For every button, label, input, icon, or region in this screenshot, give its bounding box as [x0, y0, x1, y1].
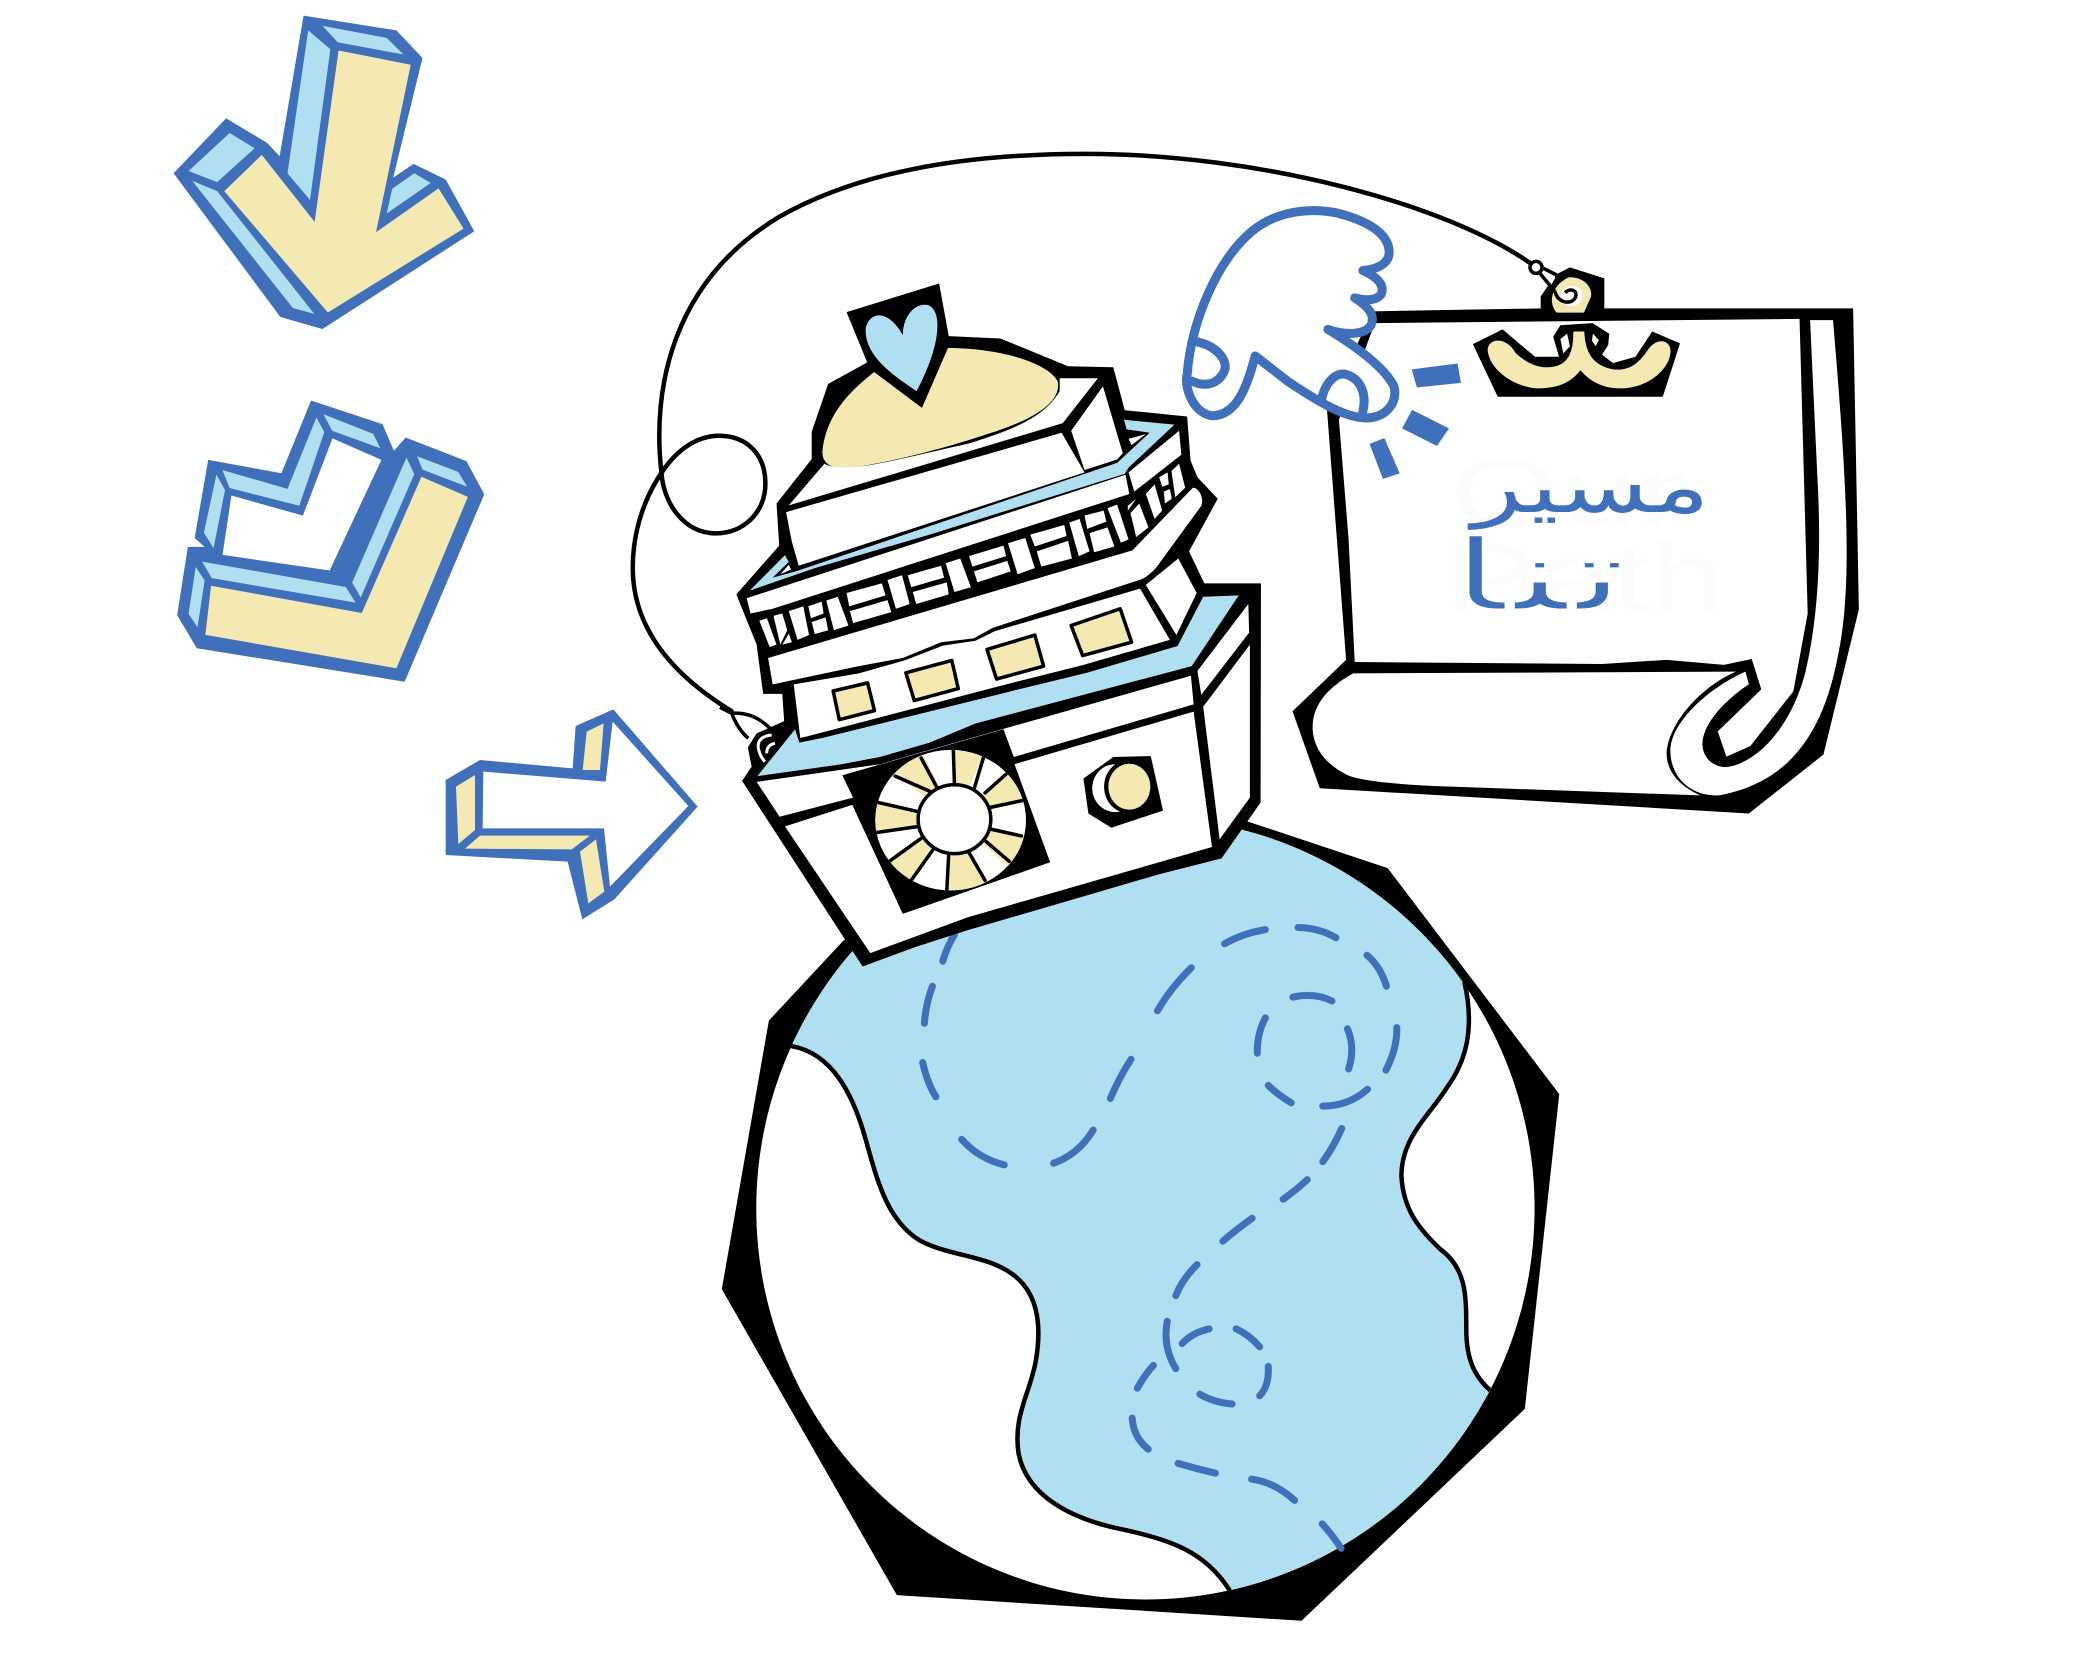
- globe: [700, 800, 1561, 1650]
- Arabic title on scroll: مسير: [1466, 445, 1710, 530]
- hand thumb and nail lines: [1192, 342, 1364, 412]
- ship black silhouette: [736, 283, 1261, 967]
- upper deck band: [747, 431, 1181, 614]
- Arabic title on scroll: تنا: [1447, 520, 1629, 631]
- curved rope linking ship and scroll: [633, 154, 1535, 711]
- porthole: [1083, 756, 1163, 828]
- hand pointing at the scroll: [1186, 211, 1395, 418]
- lower blue deck: [757, 595, 1239, 776]
- scroll bottom roll: [1313, 672, 1736, 795]
- faint background words on scroll: Our: [1450, 440, 1685, 546]
- faint background words on scroll: Path: [1445, 525, 1725, 631]
- arrow: pointing right toward the ship: [446, 709, 698, 919]
- arrow: large arrow pointing down: [174, 16, 474, 329]
- round vent window: [875, 750, 1026, 890]
- faint background words on scroll: [1445, 440, 1725, 631]
- scroll black silhouette: [1293, 308, 1859, 813]
- arrow: double chevron pointing down: [177, 400, 484, 682]
- blue rays: [1370, 364, 1461, 479]
- funnel dome: [822, 348, 1058, 468]
- scroll banner: [1293, 308, 1859, 813]
- coastlines: [792, 982, 1491, 1590]
- upper blue deck: [750, 420, 1174, 591]
- lower deck band: [768, 488, 1202, 684]
- cream windows: [833, 609, 1132, 720]
- scroll page: [1339, 319, 1808, 757]
- hull: [757, 604, 1250, 953]
- scroll hook: [1530, 261, 1604, 313]
- top cabin: [786, 378, 1123, 566]
- icon: heart: [866, 305, 937, 391]
- middle wall: [794, 559, 1197, 738]
- upper window row: [759, 464, 1185, 647]
- Arabic title on scroll: [1447, 445, 1710, 631]
- sea: [791, 830, 1490, 1590]
- ship: [736, 283, 1261, 967]
- rope hook on ship: [720, 707, 820, 775]
- dashed route across the sea: [923, 927, 1397, 1548]
- scroll curled edge: [1670, 320, 1847, 795]
- moustache emblem: [1473, 323, 1680, 397]
- globe black faceted backing: [722, 821, 1559, 1621]
